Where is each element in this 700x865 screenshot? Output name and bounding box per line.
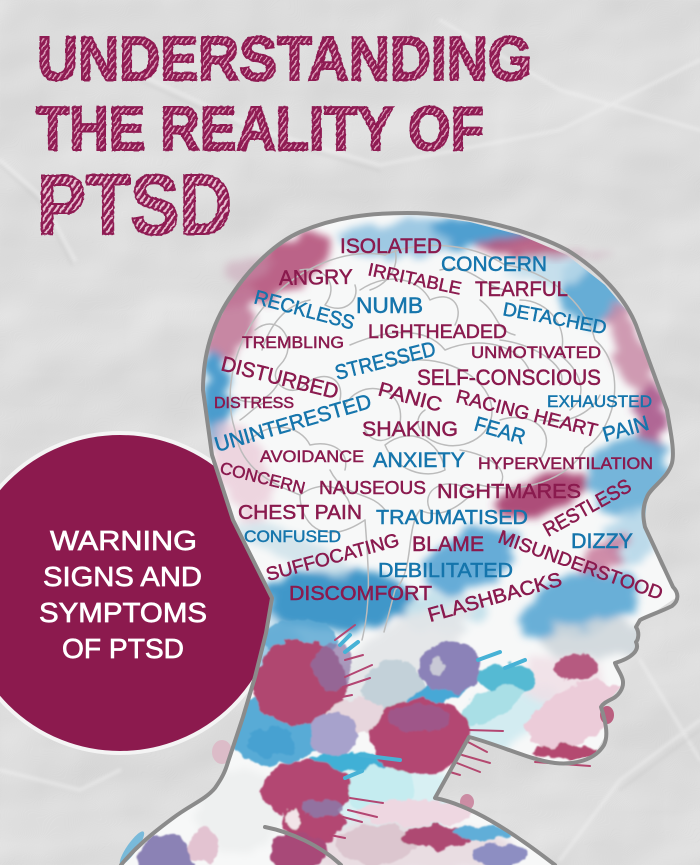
word: exhausted: EXHAUSTED [547, 392, 652, 411]
word: misunderstood: MISUNDERSTOOD [495, 527, 665, 605]
word: distress: DISTRESS [214, 395, 294, 412]
word: restless: RESTLESS [540, 475, 635, 541]
word: nightmares: NIGHTMARES [437, 481, 581, 503]
head fill [121, 213, 677, 865]
word: anxiety: ANXIETY [373, 449, 465, 472]
word: hyperventilation: HYPERVENTILATION [478, 454, 653, 473]
paint splash outside head [116, 248, 614, 865]
word: disturbed: DISTURBED [219, 353, 341, 404]
title [36, 25, 532, 253]
paint splashes inside head [137, 216, 670, 865]
word: concern maroon: CONCERN [218, 458, 307, 498]
circle line 1: WARNING [50, 525, 197, 556]
word: dizzy: DIZZY [571, 530, 633, 553]
warning circle [0, 433, 280, 753]
word: trembling: TREMBLING [242, 333, 344, 352]
circle heading [39, 525, 207, 664]
shoulder line [265, 827, 341, 865]
word: flashbacks: FLASHBACKS [425, 569, 564, 627]
word: reckless: RECKLESS [252, 287, 357, 334]
splatter marks [450, 742, 590, 775]
word: chest pain: CHEST PAIN [238, 502, 362, 524]
word: lightheaded: LIGHTHEADED [368, 322, 507, 343]
head illustration [116, 213, 677, 865]
word: debilitated: DEBILITATED [378, 560, 513, 582]
word: fear: FEAR [472, 413, 528, 449]
paint spikes inside head [330, 625, 503, 838]
word: discomfort: DISCOMFORT [289, 583, 432, 605]
word: confused: CONFUSED [244, 527, 341, 546]
word: uninterested: UNINTERESTED [212, 390, 374, 457]
word: suffocating: SUFFOCATING [264, 530, 402, 586]
word: self-conscious: SELF-CONSCIOUS [417, 365, 601, 390]
title line 2: THE REALITY OF [36, 95, 484, 164]
word: numb: NUMB [356, 293, 423, 318]
word: concern blue: CONCERN [441, 253, 547, 276]
word: unmotivated: UNMOTIVATED [471, 344, 601, 362]
word: panic: PANIC [376, 379, 444, 417]
word: avoidance: AVOIDANCE [260, 447, 364, 466]
symptom word cloud [212, 235, 665, 627]
word: tearful: TEARFUL [475, 278, 568, 301]
circle line 3: SYMPTOMS [39, 597, 207, 628]
word: stressed: STRESSED [333, 338, 438, 385]
word: detached: DETACHED [501, 299, 608, 339]
head outline [121, 213, 677, 865]
word: isolated: ISOLATED [340, 235, 442, 258]
word: shaking: SHAKING [362, 418, 458, 441]
word: nauseous: NAUSEOUS [319, 478, 426, 498]
title line 3: PTSD [37, 158, 232, 253]
word: traumatised: TRAUMATISED [376, 507, 528, 529]
word: angry: ANGRY [279, 266, 353, 290]
word: pain: PAIN [600, 412, 652, 447]
circle line 2: SIGNS AND [43, 561, 202, 592]
word: racing heart: RACING HEART [454, 386, 600, 442]
circle line 4: OF PTSD [62, 633, 184, 664]
title line 1: UNDERSTANDING [37, 25, 532, 94]
word: blame: BLAME [412, 533, 484, 556]
brain drawing [230, 245, 615, 640]
word: irritable: IRRITABLE [366, 259, 463, 299]
